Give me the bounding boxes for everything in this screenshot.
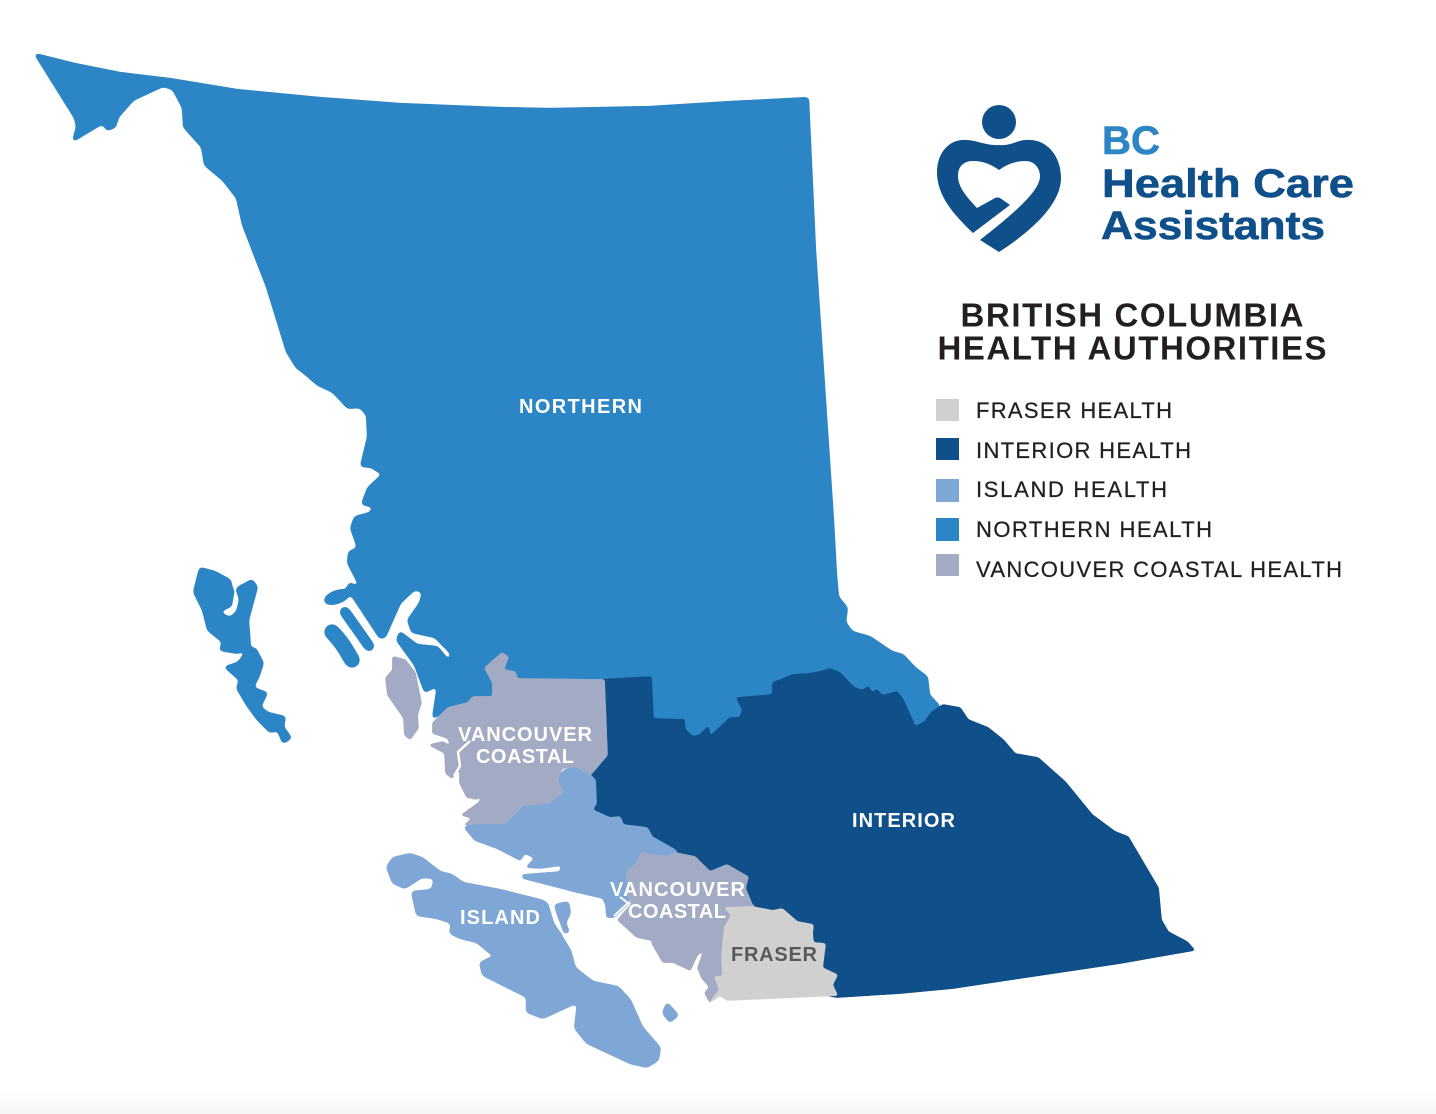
label: Fraser: FRASER — [731, 944, 818, 966]
region: Island mainland portion — [465, 766, 680, 917]
title: BRITISH COLUMBIA — [960, 296, 1304, 334]
label: Vancouver Coastal north — [458, 724, 593, 768]
island: Pitt Island — [332, 632, 352, 660]
logo wordmark — [1101, 119, 1354, 248]
title: HEALTH AUTHORITIES — [938, 330, 1326, 366]
map of British Columbia health authorities — [35, 54, 1194, 1067]
region: Northern — [35, 54, 940, 760]
label: Vancouver Coastal south: COASTAL — [628, 901, 726, 923]
island: Vancouver Coastal outer — [386, 657, 421, 739]
title — [938, 296, 1326, 366]
label: Vancouver Coastal north: VANCOUVER — [458, 724, 593, 746]
logo: BC Health Care Assistants — [937, 105, 1354, 252]
legend item: Interior Health: INTERIOR HEALTH — [976, 438, 1191, 463]
region: Vancouver Coastal north — [430, 653, 607, 825]
island: Haida Gwaii south — [225, 648, 291, 743]
inlet: Vancouver Coastal north — [454, 741, 470, 776]
island: coastal strip — [345, 612, 369, 646]
legend item: Northern Health: NORTHERN HEALTH — [976, 517, 1212, 542]
label: Interior: INTERIOR — [852, 810, 956, 832]
region: Interior — [585, 669, 1194, 997]
legend — [936, 398, 1342, 582]
island: small gulf island — [663, 1003, 678, 1022]
logo wordmark: Health Care — [1102, 162, 1354, 206]
inlet: Vancouver Coastal south — [614, 897, 628, 916]
island: coastal oval — [323, 587, 351, 607]
island: Haida Gwaii north — [194, 568, 257, 653]
logo wordmark: Assistants — [1101, 204, 1325, 248]
region: Vancouver Island — [387, 854, 678, 1067]
legend item: Island Health: ISLAND HEALTH — [976, 477, 1167, 502]
legend item: Vancouver Coastal Health: VANCOUVER COASTAL HEALTH — [976, 557, 1342, 582]
region: Fraser — [710, 907, 837, 1002]
island: Texada — [555, 902, 570, 933]
label: Vancouver Coastal south — [610, 879, 746, 923]
label: Northern: NORTHERN — [519, 396, 642, 418]
logo wordmark: BC — [1102, 119, 1160, 163]
label: Vancouver Coastal south: VANCOUVER — [610, 879, 746, 901]
label: Island: ISLAND — [460, 907, 540, 929]
label: Vancouver Coastal north: COASTAL — [476, 746, 574, 768]
region: Vancouver Coastal south — [618, 852, 760, 1002]
legend item: Fraser Health: FRASER HEALTH — [976, 398, 1172, 423]
icon: person and heart — [937, 105, 1061, 252]
